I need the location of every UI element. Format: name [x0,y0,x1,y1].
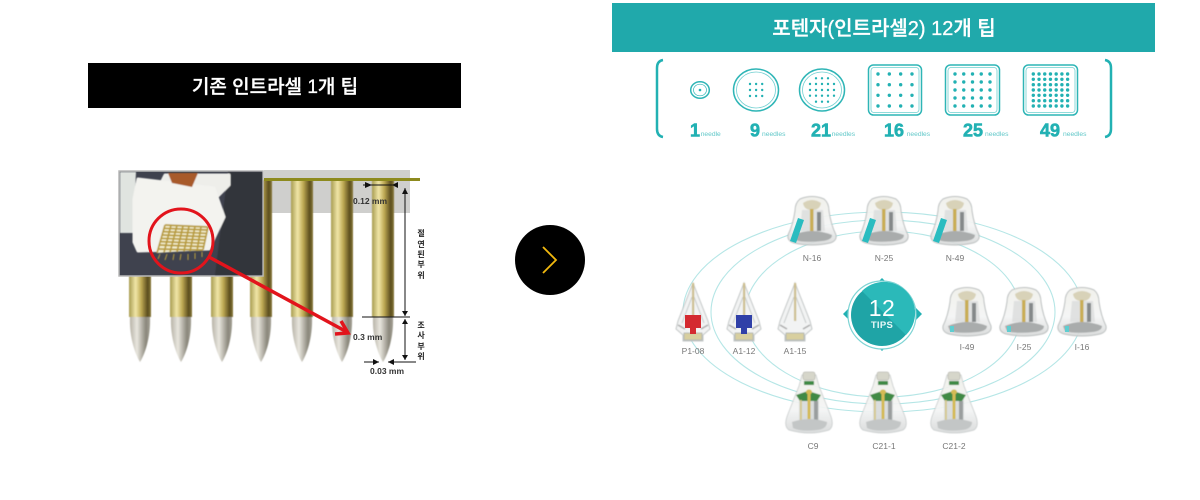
tip: C9: C9 [808,441,819,451]
inset photo: handpiece tip [119,171,263,276]
heading: existing Intracel 1 tip [88,63,461,108]
tip: A1-12: A1-12 [733,346,756,356]
tip: C9 [786,372,832,451]
heading: Potenza 12 tips: 포텐자(인트라셀2) 12개 팁 [772,17,996,40]
orbit ellipses [683,212,1083,412]
tip: N-16 [788,196,836,263]
grey backing band [264,170,410,213]
center badge: 12 tips: TIPS [871,320,893,331]
needle count labels: needles [985,131,1009,138]
tip: N-25: N-25 [875,253,893,263]
needle count labels: 1 [690,120,700,140]
needle count labels: 49 [1040,120,1060,140]
tip: A1-15: A1-15 [784,346,807,356]
needle count labels: 9 [750,120,760,140]
needle count labels: needle [701,131,721,138]
tip: I-49: I-49 [960,342,975,352]
needle count labels: needles [832,131,856,138]
icon: 25 needles [946,65,1000,115]
needle count labels [690,120,1087,140]
needle row [129,180,394,362]
dimension label: 0.12 mm: 0.12 mm [353,196,387,206]
tip: I-49 [943,288,991,352]
vertical label: insulated section [417,228,425,280]
tip: A1-15 [778,283,812,356]
needle count labels: needles [1063,131,1087,138]
tip: I-16 [1058,288,1106,352]
panel: needle configurations [657,60,1111,140]
tip: P1-08: P1-08 [682,346,705,356]
diagram: gold needle cross-section with inset photo [119,170,425,376]
tip: N-49: N-49 [946,253,964,263]
dimension label: 0.03 mm: 0.03 mm [370,366,404,376]
vertical label: irradiated section: 사 [417,330,425,340]
vertical label: irradiated section [417,321,425,361]
needle count labels: needles [907,131,931,138]
center badge: 12 tips: 12 [869,295,895,321]
red arrow [209,257,348,334]
left bracket [657,60,663,137]
dimension label: 0.3 mm: 0.3 mm [353,332,383,342]
tip: N-25 [860,196,908,263]
icon: 9 needles [734,69,778,111]
heading: Potenza 12 tips [612,3,1155,52]
vertical label: irradiated section: 위 [417,351,425,361]
red highlight circle [149,209,213,273]
tip: A1-12 [727,283,761,356]
vertical label: irradiated section: 부 [417,342,425,351]
tip: I-25 [1000,288,1048,352]
vertical label: insulated section: 위 [417,270,425,280]
tip: N-16: N-16 [803,253,821,263]
arrow button [515,225,585,295]
vertical label: insulated section: 부 [417,260,425,269]
needle count labels: 25 [963,120,983,140]
icon: 1 needle [691,82,709,98]
tip: C21-2 [931,372,977,451]
right bracket [1105,60,1111,137]
tip: C21-2: C21-2 [942,441,966,451]
vertical label: irradiated section: 조 [417,321,425,330]
tip: C21-1 [860,372,906,451]
vertical label: insulated section: 연 [417,239,425,249]
vertical label: insulated section: 된 [417,249,425,259]
needle count labels: 21 [811,120,831,140]
icon: 49 needles [1024,65,1078,115]
vertical label: insulated section: 절 [417,228,425,238]
tip: C21-1: C21-1 [872,441,896,451]
tip: I-25: I-25 [1017,342,1032,352]
dimension lines [362,185,416,362]
icon: 16 needles [868,65,922,115]
chart: 12 tips orbit diagram [676,196,1106,451]
needle count labels: needles [762,131,786,138]
olive top plate [264,178,420,181]
needle count labels: 16 [884,120,904,140]
heading: existing Intracel 1 tip: 기존 인트라셀 1개 팁 [192,76,358,98]
center badge: 12 tips [843,278,922,351]
tip: P1-08 [676,283,710,356]
icon: 21 needles [800,69,844,111]
tip: N-49 [931,196,979,263]
tip: I-16: I-16 [1075,342,1090,352]
